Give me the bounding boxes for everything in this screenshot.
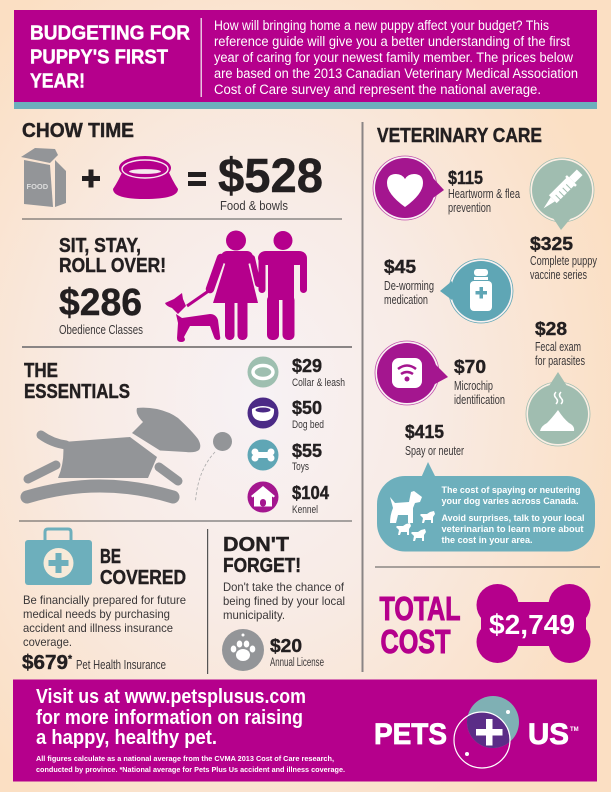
label: dog bed: Dog bed — [292, 419, 324, 431]
logo: pets plus us: PETS — [374, 718, 447, 751]
text: visit us: Visit us at www.petsplusus.com — [36, 686, 306, 708]
label: pet health insurance: Pet Health Insurance — [76, 658, 166, 672]
heading: sit stay roll over — [59, 235, 166, 277]
heading: don't forget — [223, 533, 301, 577]
text: footnote: conducted by province. *National average for Pets Plus Us accident and illness coverage. — [36, 765, 345, 774]
text: license description: Don't take the chance of — [223, 580, 345, 594]
price: toys: $55 — [292, 441, 322, 461]
icon: fecal bubble — [526, 372, 590, 446]
icon: toy bone — [248, 440, 278, 470]
icon: dog family — [390, 491, 435, 541]
label: de-worming medication: medication — [384, 293, 428, 307]
label: spay or neuter: Spay or neuter — [405, 444, 464, 458]
icon: kennel — [248, 482, 278, 512]
heading: be covered: BE — [100, 546, 121, 568]
icon: bone with total — [476, 584, 590, 663]
heading: chow time: CHOW TIME — [22, 120, 134, 142]
label: fecal exam for parasites — [535, 340, 585, 368]
label: fecal exam for parasites: Fecal exam — [535, 340, 581, 354]
panel: footer — [13, 680, 597, 782]
price: vaccine: $325 — [530, 234, 573, 254]
heading: be covered: COVERED — [100, 567, 186, 589]
price: insurance: * — [68, 654, 72, 665]
heading: total cost: TOTAL — [380, 590, 460, 627]
text: license description: municipality. — [223, 608, 285, 622]
label: vaccine series — [530, 254, 598, 282]
label: fecal exam for parasites: for parasites — [535, 354, 585, 368]
text: visit us — [36, 686, 306, 749]
icon: collar — [248, 356, 278, 388]
text: license description: being fined by your local — [223, 594, 345, 608]
label: de-worming medication — [384, 279, 434, 307]
text: callout copy: Avoid surprises, talk to your local — [442, 513, 584, 524]
price: kennel: $104 — [292, 483, 329, 503]
icon: microchip bubble — [375, 341, 448, 405]
heading: don't forget: FORGET! — [223, 554, 301, 577]
heading: be covered — [100, 546, 186, 589]
label: vaccine series: vaccine series — [530, 268, 587, 282]
label: kennel: Kennel — [292, 504, 318, 516]
label: annual license: Annual License — [270, 657, 324, 669]
intro text: reference guide will give you a better understanding of the first — [214, 34, 570, 49]
text: callout copy: your dog varies across Canada. — [442, 496, 578, 507]
icon: bowl — [113, 156, 178, 199]
text: insurance description: accident and illness insurance — [23, 621, 173, 635]
label: heartworm and flea prevention: prevention — [448, 201, 491, 215]
text: callout copy: The cost of spaying or neutering — [442, 485, 581, 496]
panel: header — [14, 10, 597, 109]
label: food and bowls: Food & bowls — [220, 198, 288, 213]
icon: running dog — [27, 408, 200, 497]
text: footnote — [36, 754, 345, 774]
icon: bottle bubble — [440, 259, 513, 323]
price: fecal exam: $28 — [535, 319, 567, 339]
text: insurance description: medical needs by purchasing — [23, 607, 170, 621]
heading: veterinary care: VETERINARY CARE — [377, 125, 542, 147]
icon: couple walking dog — [165, 230, 307, 342]
label: heartworm and flea prevention: Heartworm & flea — [448, 187, 520, 201]
callout: spay or neuter cost — [377, 462, 595, 552]
heading: the essentials: THE — [24, 360, 58, 382]
heading: total cost: COST — [380, 623, 450, 660]
logo: pets plus us: US — [528, 718, 569, 751]
icon: heart bubble — [373, 156, 444, 220]
price: obedience: $286 — [59, 282, 142, 324]
icon: ball — [213, 432, 232, 451]
text: visit us: for more information on raising — [36, 707, 303, 729]
panel: veterinary care — [373, 125, 598, 552]
label: microchip identification: Microchip — [454, 379, 493, 393]
panel: be covered — [22, 529, 186, 674]
intro text — [214, 18, 578, 97]
heading: total cost — [380, 590, 460, 660]
title: YEAR! — [30, 70, 85, 92]
price: insurance: $679 — [22, 652, 66, 674]
label: toys: Toys — [292, 461, 309, 473]
price: dog bed: $50 — [292, 398, 322, 418]
heading: don't forget: DON'T — [223, 533, 289, 556]
logo: pets plus us — [374, 696, 579, 768]
price: heartworm: $115 — [448, 168, 483, 188]
price: de-worming: $45 — [384, 257, 416, 277]
text: visit us: a happy, healthy pet. — [36, 727, 217, 749]
title: BUDGETING FOR — [30, 22, 191, 44]
icon: first aid kit — [25, 529, 92, 585]
intro text: How will bringing home a new puppy affect your budget? This — [214, 18, 549, 33]
panel: total cost — [380, 584, 590, 663]
price: collar: $29 — [292, 356, 322, 376]
icon: equals — [188, 172, 206, 186]
title — [30, 22, 191, 92]
icon: food bag: FOOD — [26, 182, 49, 191]
panel: the essentials — [24, 356, 345, 516]
text: callout copy: the cost in your area. — [442, 535, 532, 546]
heading: sit stay roll over: ROLL OVER! — [59, 255, 166, 277]
intro text: are based on the 2013 Canadian Veterinary Medical Association — [214, 66, 578, 81]
intro text: Cost of Care survey and represent the national average. — [214, 82, 541, 97]
price: microchip: $70 — [454, 357, 486, 377]
price: license: $20 — [270, 636, 302, 656]
text: callout copy: veterinarian to learn more about — [442, 524, 584, 535]
text: insurance description: Be financially prepared for future — [23, 593, 186, 607]
text: license description — [223, 580, 345, 622]
label: microchip identification: identification — [454, 393, 505, 407]
intro text: year of caring for your newest family member. The prices below — [214, 50, 573, 65]
label: heartworm and flea prevention — [448, 187, 520, 215]
icon: paw tag — [222, 629, 264, 671]
icon: syringe bubble — [530, 158, 594, 230]
panel: chow time — [21, 120, 323, 213]
label: collar and leash: Collar & leash — [292, 377, 345, 389]
title: PUPPY'S FIRST — [30, 46, 168, 68]
text: footnote: All figures calculate as a national average from the CVMA 2013 Cost of Care research, — [36, 754, 334, 763]
panel: obedience — [59, 230, 307, 342]
heading: sit stay roll over: SIT, STAY, — [59, 235, 141, 257]
icon: plus — [82, 170, 100, 188]
label: obedience classes: Obedience Classes — [59, 323, 143, 337]
text: callout copy — [442, 485, 584, 546]
logo: pets plus us: TM — [570, 727, 579, 733]
price: food: $528 — [218, 150, 323, 203]
icon: dog bed — [248, 398, 278, 428]
text: insurance description: coverage. — [23, 635, 72, 649]
price: spay or neuter: $415 — [405, 422, 444, 442]
label: microchip identification — [454, 379, 505, 407]
panel: don't forget — [222, 533, 345, 671]
total amount: $2,749 — [489, 609, 575, 640]
text: insurance description — [23, 593, 186, 649]
heading: the essentials: ESSENTIALS — [24, 381, 130, 403]
icon: food bag — [21, 148, 66, 207]
heading: the essentials — [24, 360, 130, 403]
label: de-worming medication: De-worming — [384, 279, 434, 293]
